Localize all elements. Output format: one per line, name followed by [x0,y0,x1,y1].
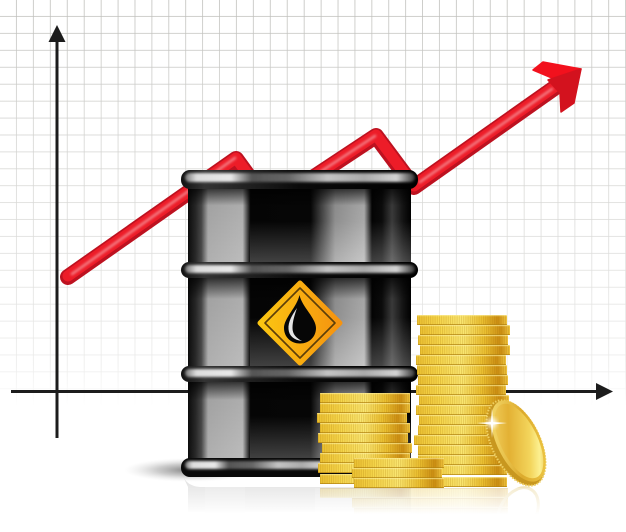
arrowhead [533,62,581,112]
coin stacks reflection [315,480,555,532]
coin sparkle [477,408,507,438]
short coin stack [352,458,444,488]
red rising arrow [68,62,581,277]
vertical axis arrow [48,25,66,438]
bottom rim [181,458,418,477]
lower middle rim [181,366,418,382]
barrel floor shadow [124,458,256,482]
background grid [0,0,626,406]
barrel reflection [180,474,420,514]
medium coin stack [317,393,412,484]
upper middle rim [181,262,418,278]
icon: oil drop [284,295,316,344]
icon: oil warning diamond [260,283,340,363]
barrel body [188,178,415,470]
horizontal axis arrow [11,383,613,400]
leaning gold coin [474,391,558,495]
tall coin stack [414,315,510,487]
oil barrel [181,170,418,477]
top rim [181,170,418,189]
